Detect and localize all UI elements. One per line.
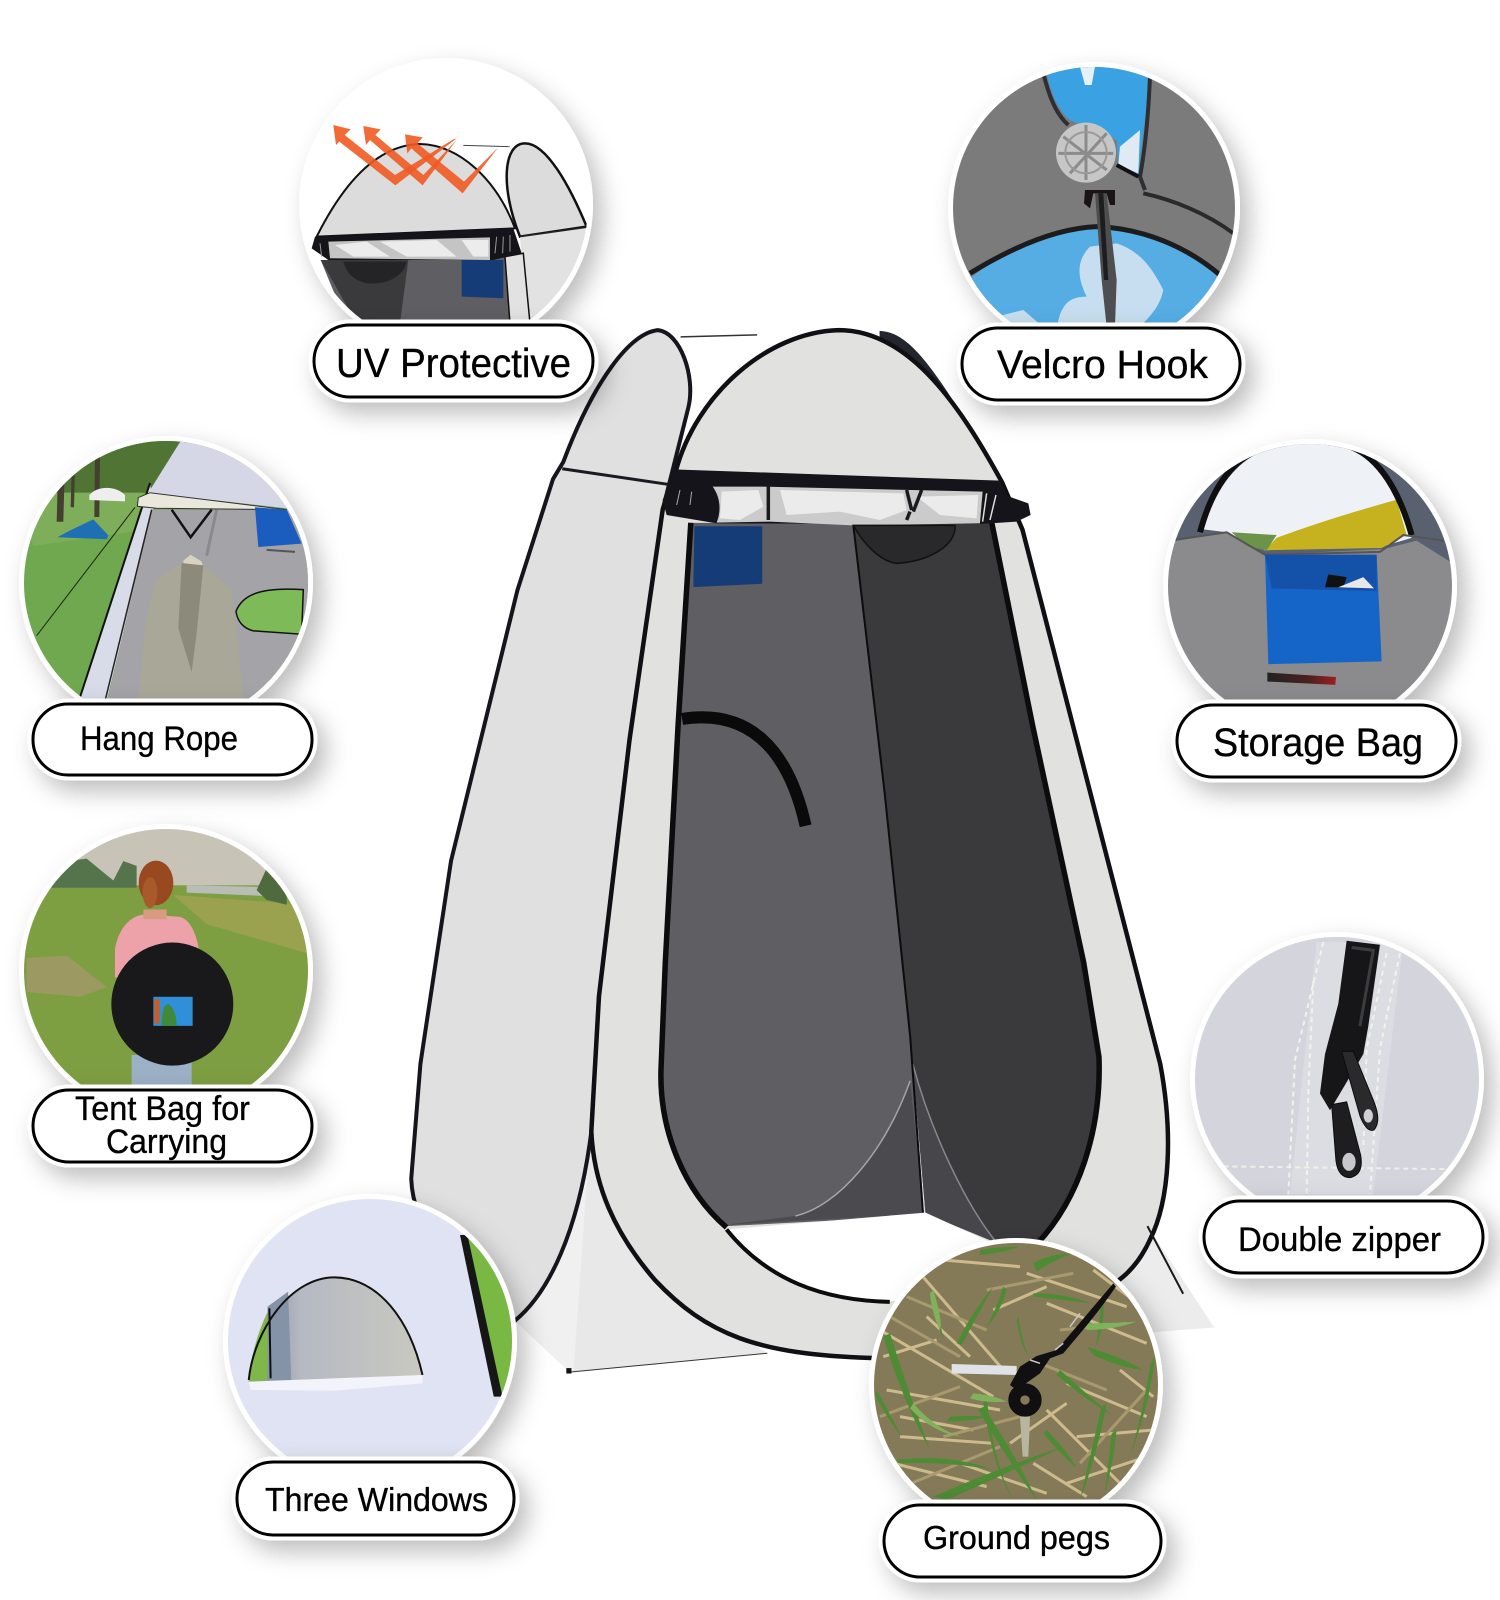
label: Tent Bag for Carrying: [32, 1089, 313, 1163]
tent floor: [727, 1213, 997, 1302]
label: Velcro Hook: [961, 327, 1241, 401]
panel: Hang Rope: [13, 430, 320, 776]
panel: Tent Bag for Carrying: [13, 817, 320, 1163]
label: UV Protective: UV Protective: [336, 340, 571, 386]
label: Storage Bag: [1176, 704, 1457, 778]
photo: velcro hook under sky: [953, 67, 1235, 322]
hanging arc strap: [682, 717, 806, 826]
photo: tent window: [228, 1199, 512, 1456]
tent front frame panel: [591, 330, 1168, 1358]
panel: Double zipper: [1183, 925, 1490, 1274]
label: Hang Rope: [32, 703, 313, 776]
main tent illustration: [411, 330, 1214, 1374]
label: UV Protective: [313, 324, 594, 398]
panel: Ground pegs: [867, 1237, 1167, 1578]
label: Three Windows: Three Windows: [265, 1481, 488, 1518]
tent right flap edge: [1147, 1226, 1183, 1294]
photo: woman carrying tent bag: [24, 829, 308, 1084]
label: Double zipper: Double zipper: [1238, 1221, 1441, 1259]
photo: blue storage pocket: [1168, 444, 1452, 700]
tent left side panel: [411, 330, 690, 1321]
tent door opening left gray: [661, 523, 923, 1226]
tent door outline: [661, 523, 1099, 1243]
label: Storage Bag: Storage Bag: [1213, 721, 1423, 765]
panel: Three Windows: [210, 1190, 535, 1536]
label: Three Windows: [236, 1461, 515, 1536]
label: Hang Rope: Hang Rope: [80, 720, 238, 758]
tent inner lower wedges: [727, 1081, 924, 1225]
label: Tent Bag for Carrying: Tent Bag for: [75, 1090, 250, 1128]
panel: Velcro Hook: [930, 50, 1260, 401]
panel: UV Protective: [280, 40, 620, 398]
photo: ground peg in grass: [867, 1237, 1167, 1503]
label: Double zipper: [1203, 1200, 1484, 1274]
label: Ground pegs: [883, 1504, 1162, 1578]
tent back rim: [880, 331, 1002, 482]
photo: jacket hanging in tent: [24, 441, 308, 698]
mesh pocket dark: [853, 525, 955, 563]
storage pocket blue: [693, 526, 762, 587]
label: Velcro Hook: Velcro Hook: [997, 343, 1209, 387]
label: Ground pegs: Ground pegs: [923, 1519, 1110, 1556]
photo: tent with UV arrows: [312, 125, 587, 320]
photo: double zipper: [1195, 937, 1479, 1196]
tent door opening right dark: [853, 523, 1099, 1243]
panel: Storage Bag: [1157, 431, 1463, 778]
tent ground flap left: [515, 1138, 767, 1372]
label: Tent Bag for Carrying: Carrying: [106, 1123, 227, 1161]
tent ground flap right: [1038, 1226, 1214, 1341]
rolled door band: [663, 469, 1031, 563]
